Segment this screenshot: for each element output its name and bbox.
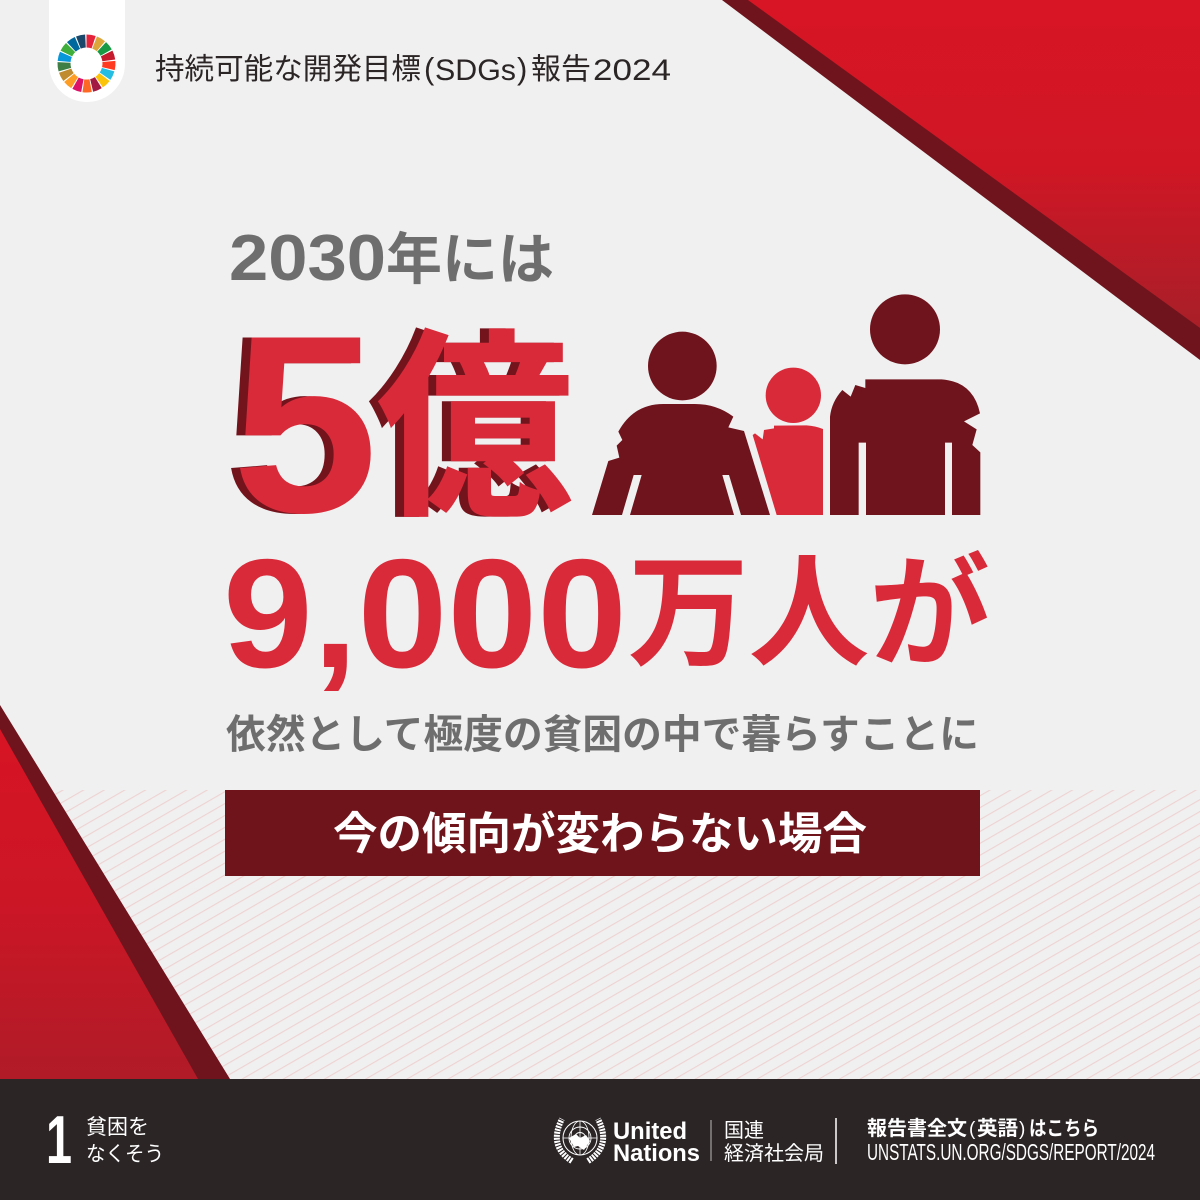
goal number: 1 — [46, 1102, 72, 1178]
goal name: なくそう — [86, 1138, 164, 1168]
icon: child — [753, 368, 823, 515]
big number: 9,000万人が: 9,000 — [223, 527, 627, 700]
banner: condition: 今の傾向が変わらない場合 — [333, 797, 867, 862]
heading: 2030年には: 年には — [386, 215, 554, 296]
department name: 国連 — [724, 1114, 764, 1143]
icon: right adult — [830, 294, 980, 515]
big number: 5億: 億 — [377, 266, 573, 556]
goal name: 貧困を — [86, 1111, 149, 1141]
icon: UN emblem — [557, 1119, 603, 1161]
report link: はこちら — [1029, 1112, 1099, 1141]
big number: 5億: 5 — [223, 282, 369, 566]
department name — [724, 1114, 824, 1166]
icon: left adult — [592, 332, 770, 515]
wordmark: United Nations: United — [613, 1118, 687, 1145]
heading: 2030年には: 2030 — [229, 221, 386, 294]
header title: 2024 — [593, 54, 671, 87]
icon: SDG wheel logo tab — [49, 0, 125, 102]
big number: 9,000万人が — [223, 515, 990, 700]
header title — [155, 46, 671, 88]
wordmark: United Nations: Nations — [613, 1140, 700, 1167]
report link: 報告書全文 — [867, 1112, 967, 1141]
big number: 5億: 5 — [232, 282, 378, 566]
decoration: bottom-left red corner — [0, 705, 230, 1079]
subheading: 依然として極度の貧困の中で暮らすことに — [226, 702, 979, 760]
icon: family of three people — [592, 294, 980, 515]
report link: 英語 — [977, 1112, 1018, 1141]
header title: ( — [424, 51, 435, 86]
header title: ) — [517, 51, 527, 86]
wordmark: United Nations — [613, 1118, 700, 1167]
footer bar — [0, 1079, 1200, 1200]
header title: SDGs — [435, 54, 516, 87]
heading: 2030年には — [229, 215, 554, 296]
banner: condition — [225, 790, 980, 876]
report link: ( — [969, 1119, 976, 1140]
big number: 5億: 億 — [368, 266, 564, 556]
report link: ) — [1019, 1119, 1025, 1140]
big number: 9,000万人が: 万人が — [628, 515, 990, 692]
big number: 5億 — [223, 266, 573, 566]
header title: 持続可能な開発目標 — [155, 46, 421, 88]
report link — [867, 1112, 1155, 1165]
decoration: top-right red corner — [722, 0, 1200, 360]
department name: 経済社会局 — [724, 1137, 824, 1166]
goal name — [86, 1111, 164, 1168]
header title: 報告 — [531, 46, 591, 88]
